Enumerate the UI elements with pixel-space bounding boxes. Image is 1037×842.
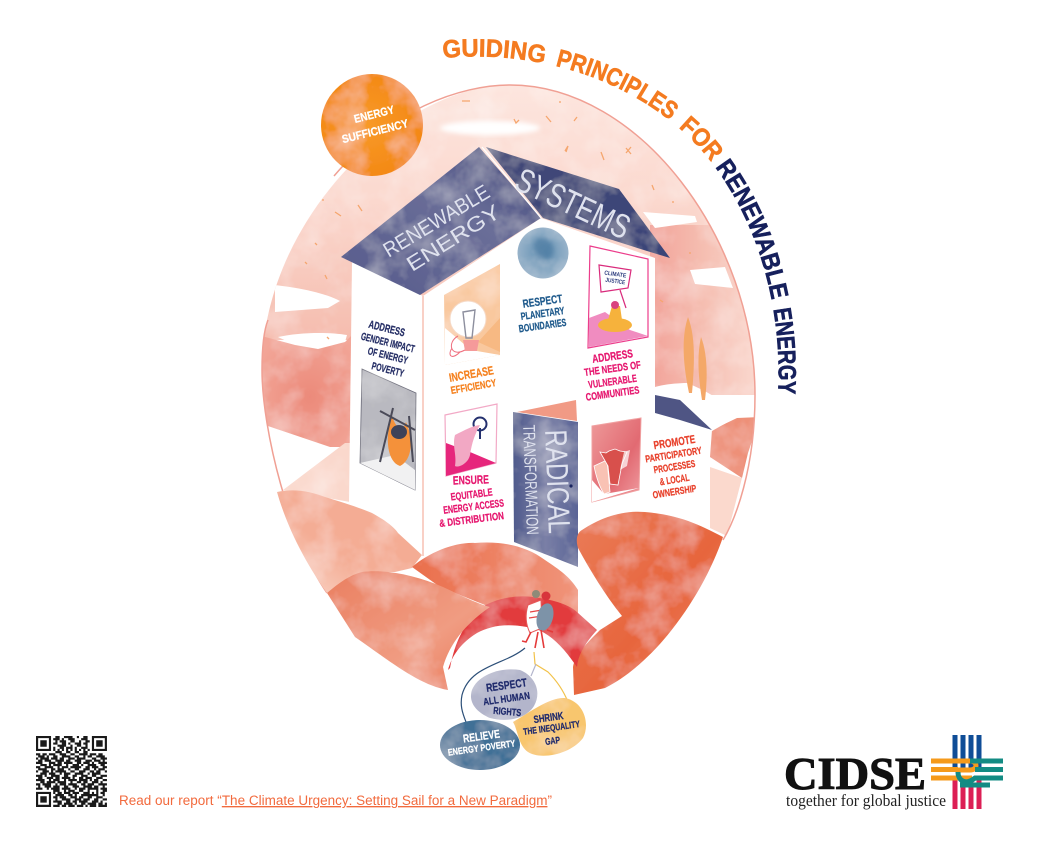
roof: RENEWABLE (379, 181, 494, 262)
title: curved heading: RENEWABLE (716, 158, 789, 300)
text: ensure equitable energy access and distribution: ENERGY ACCESS (443, 497, 505, 517)
icon: hand pressing switch window (445, 404, 497, 476)
white clouds (643, 212, 697, 228)
bubble: relieve energy poverty: ENERGY POVERTY (447, 738, 517, 759)
icon: couple sitting on the hill (522, 590, 556, 648)
logo: CIDSE (784, 735, 1003, 810)
bubble: respect all human rights: ALL HUMAN (483, 691, 531, 708)
text: promote participatory processes and local ownership: PARTICIPATORY (645, 446, 703, 465)
text: report link: Read our report “The Climate Urgency: Setting Sail for a New Paradigm” (119, 793, 552, 808)
QR code (36, 737, 107, 806)
bubble: shrink the inequality gap: SHRINK (533, 710, 565, 726)
text: ensure equitable energy access and distribution (439, 472, 505, 530)
icon: light bulb window (444, 264, 500, 365)
bubble: respect all human rights (471, 669, 537, 720)
oval outline (262, 85, 755, 593)
blue bars (955, 735, 979, 768)
text: address gender impact of energy poverty: OF ENERGY (366, 345, 409, 367)
text: address the needs of vulnerable communities: COMMUNITIES (585, 384, 640, 404)
title: curved heading: ENERGY (773, 308, 796, 394)
right red patch (710, 417, 754, 478)
panel: foreground hills (277, 490, 723, 695)
text: increase efficiency: INCREASE (448, 363, 495, 385)
text: promote participatory processes and local ownership: PROMOTE (653, 434, 696, 452)
bubble: respect all human rights: RIGHTS (493, 706, 522, 719)
sky sparkles (305, 101, 690, 339)
text: address gender impact of energy poverty: POVERTY (370, 360, 405, 380)
text: address the needs of vulnerable communities: ADDRESS (591, 348, 634, 366)
orange bars (931, 761, 976, 778)
text: promote participatory processes and local ownership (645, 434, 703, 501)
roof: SYSTEMS (509, 161, 636, 247)
teal bars (958, 761, 1003, 785)
logo: CIDSE: together for global justice (786, 791, 946, 810)
panel: watercolor landscape oval (261, 84, 756, 594)
text: address gender impact of energy poverty: ADDRESS (367, 319, 406, 339)
sky wash (264, 86, 709, 340)
bubble: shrink the inequality gap: GAP (544, 735, 561, 748)
bubble: relieve energy poverty: RELIEVE (462, 728, 501, 746)
bubble: relieve energy poverty (440, 720, 520, 770)
text: address gender impact of energy poverty: GENDER IMPACT (360, 331, 416, 356)
roof: ENERGY (403, 201, 505, 276)
left pale band (283, 443, 352, 502)
panel: house walls (349, 218, 709, 562)
text: respect planetary boundaries: PLANETARY (520, 305, 565, 323)
chart: speech bubbles of principles (440, 648, 586, 770)
bubble: shrink the inequality gap (513, 698, 586, 756)
text: promote participatory processes and local ownership: PROCESSES (653, 459, 696, 476)
ledge and trees on the right (655, 317, 740, 431)
bubble: shrink the inequality gap: THE INEQUALITY (523, 719, 581, 738)
text: ensure equitable energy access and distribution: ENSURE (453, 472, 489, 488)
icon: raised hands window (592, 418, 641, 502)
connector lines (461, 648, 568, 722)
icon: cooking fire window (360, 369, 416, 490)
text: address the needs of vulnerable communities (584, 348, 642, 404)
text: address gender impact of energy poverty (360, 319, 416, 380)
icon: sun Energy Sufficiency: ENERGY (353, 104, 396, 126)
text: address the needs of vulnerable communities: VULNERABLE (587, 373, 638, 391)
door: radical transformation: RADICAL (538, 429, 577, 534)
text: increase efficiency (448, 363, 497, 397)
logo: CIDSE: CIDSE (784, 749, 926, 799)
text: increase efficiency: EFFICIENCY (450, 377, 497, 397)
text: respect planetary boundaries: RESPECT (522, 293, 563, 311)
title: curved heading: PRINCIPLES (556, 49, 678, 118)
text: respect planetary boundaries: BOUNDARIES (518, 317, 567, 335)
text: respect planetary boundaries (518, 293, 567, 335)
bubble: respect all human rights: RESPECT (485, 677, 528, 695)
title: curved heading: GUIDING (443, 38, 546, 62)
text: ensure equitable energy access and distribution: & DISTRIBUTION (439, 510, 505, 530)
icon: planet Earth (518, 228, 568, 278)
icon: climate justice protester window: CLIMATE (604, 271, 626, 280)
door: radical transformation: TRANSFORMATION (519, 425, 542, 535)
left red band (258, 335, 352, 447)
icon: sun Energy Sufficiency: SUFFICIENCY (341, 118, 410, 146)
title: curved heading: FOR (679, 115, 722, 162)
text: promote participatory processes and local ownership: OWNERSHIP (652, 484, 697, 501)
door: radical transformation (513, 400, 578, 567)
text: address the needs of vulnerable communities: THE NEEDS OF (584, 359, 642, 379)
icon: climate justice protester window (588, 246, 648, 348)
red bars (955, 780, 979, 809)
icon: climate justice protester window: JUSTICE (605, 278, 625, 286)
title: curved heading (443, 38, 796, 394)
roof (341, 147, 670, 295)
text: ensure equitable energy access and distribution: EQUITABLE (450, 487, 493, 504)
text: promote participatory processes and local ownership: & LOCAL (659, 473, 690, 488)
icon: sun Energy Sufficiency (321, 74, 423, 176)
